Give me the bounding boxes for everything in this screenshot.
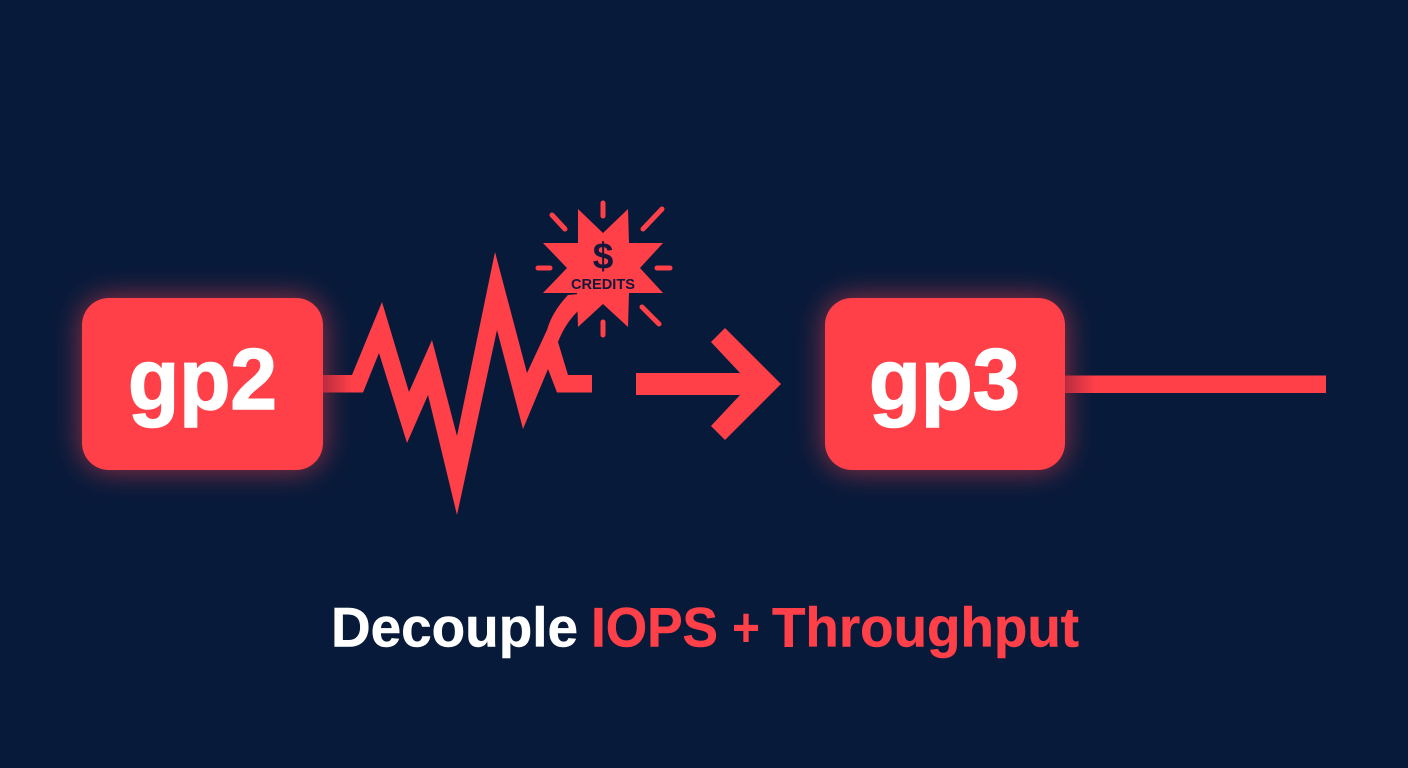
box: gp2 bbox=[82, 298, 323, 470]
gp3 label: gp3 bbox=[869, 332, 1020, 428]
gp2 label: gp2 bbox=[128, 332, 277, 428]
burst star bbox=[543, 209, 663, 327]
box: gp3 bbox=[825, 298, 1065, 470]
dollar sign: $ bbox=[593, 236, 614, 276]
title: Throughput: Throughput bbox=[772, 596, 1079, 658]
title: IOPS: IOPS bbox=[591, 596, 718, 658]
title: white part: Decouple bbox=[331, 596, 578, 658]
credits label: CREDITS bbox=[571, 276, 635, 293]
flat gp3 performance line bbox=[1065, 376, 1326, 393]
title bbox=[331, 596, 1079, 658]
gp2 panel bbox=[82, 298, 323, 470]
title: plus sign: + bbox=[732, 596, 760, 658]
arrow: gp2 to gp3 bbox=[636, 328, 781, 440]
icon: credits burst bbox=[538, 203, 670, 335]
box glow: gp2 bbox=[82, 298, 323, 470]
box glow: gp3 bbox=[825, 298, 1065, 470]
burst rays bbox=[538, 203, 670, 335]
gp3 panel bbox=[825, 298, 1065, 470]
volatile gp2 waveform line bbox=[323, 252, 592, 515]
